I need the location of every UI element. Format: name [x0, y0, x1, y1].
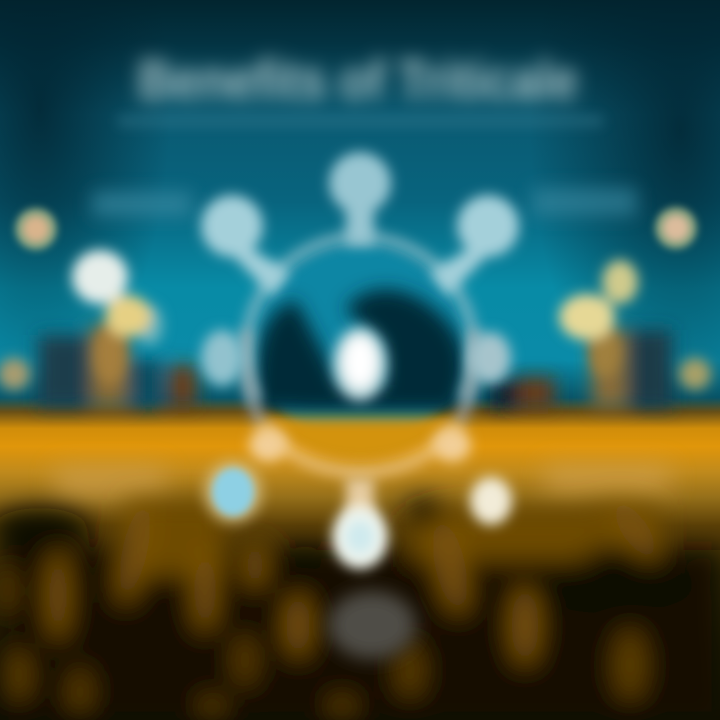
- node: lower left connector: [249, 428, 287, 462]
- node: lower right connector: [433, 428, 471, 462]
- node: upper left: [201, 195, 290, 296]
- far right orb: [655, 207, 697, 249]
- right light cluster: [559, 260, 638, 378]
- node: top: [329, 152, 391, 245]
- dark patches: [0, 498, 695, 613]
- wheat stalks: lower row: [0, 566, 645, 720]
- dark base: [0, 550, 720, 720]
- field: blurred wheat below the horizon: [0, 493, 720, 720]
- wheat stalks: upper row: [47, 493, 666, 665]
- warm mid tones: [125, 500, 660, 575]
- central bright shape: [333, 327, 387, 401]
- skyline: right buildings: [490, 330, 672, 408]
- left light cluster: [72, 250, 163, 385]
- hub dark silhouette shapes: [255, 289, 465, 412]
- hub interior: [258, 243, 462, 447]
- sky edge shading: right: [530, 0, 720, 430]
- node: lower left: [203, 460, 263, 524]
- hub lower gold fill: [262, 418, 458, 462]
- field: pale band right: [545, 466, 670, 492]
- ring side shading: [246, 330, 474, 425]
- subtitle line: [118, 116, 603, 126]
- lower ring warm overlay: [262, 425, 458, 472]
- grey blurred label below the diagram: [328, 591, 416, 659]
- hub ring: [246, 237, 474, 400]
- sky edge shading: left: [0, 0, 170, 390]
- far left orb: [15, 208, 57, 250]
- node: bottom: [332, 478, 388, 569]
- central diagram: hub and spokes: [201, 152, 519, 569]
- node: upper right: [430, 195, 519, 296]
- node: left: [201, 330, 243, 386]
- skyline: left buildings: [38, 325, 196, 407]
- field: pale band left: [55, 468, 165, 496]
- left caption: [92, 192, 192, 216]
- far right low orb: [679, 358, 711, 390]
- node: lower right: [470, 477, 512, 525]
- title: Benefits of Triticale: [138, 48, 578, 111]
- far left low orb: [0, 358, 30, 390]
- right caption: [532, 188, 637, 216]
- node: right: [469, 332, 511, 384]
